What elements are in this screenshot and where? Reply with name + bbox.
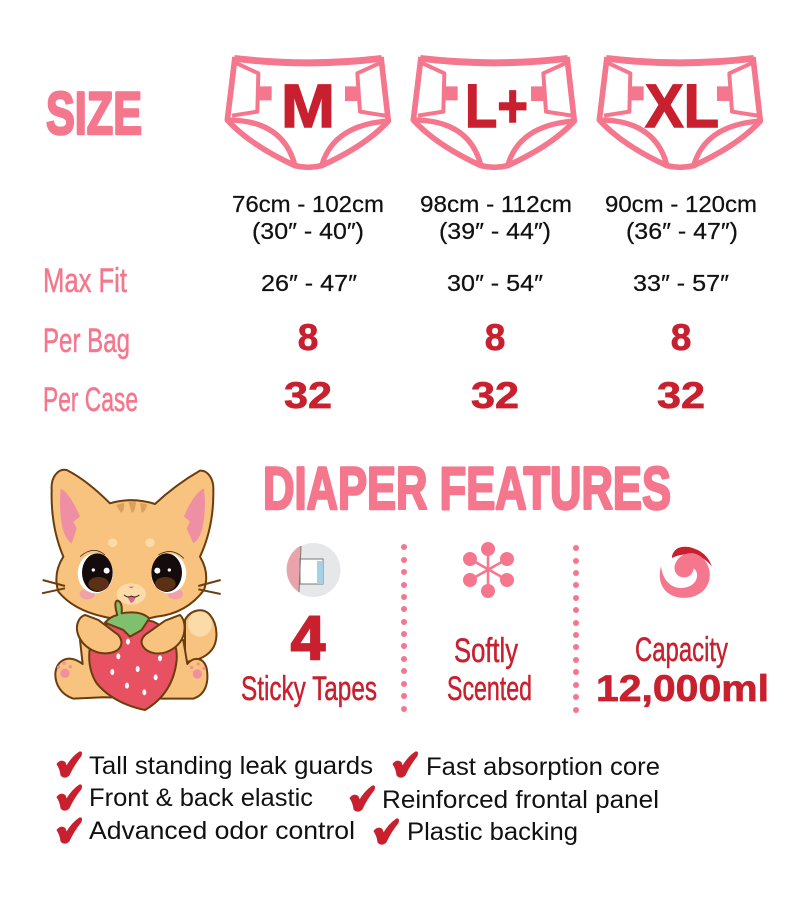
label: Softly Scented [447,632,532,708]
waist sizes M: (30″ - 40″) [252,218,364,244]
body and feet [55,640,207,699]
icon: absorbency swirl [660,547,712,598]
label: Sticky Tapes: Sticky Tapes [241,670,377,708]
per bag values: 8 [671,317,691,358]
label: Per Case: Per Case [43,381,138,419]
waist sizes L+: 98cm - 112cm [420,191,572,217]
waist sizes XL: (36″ - 47″) [626,218,738,244]
per case values: 32 [284,375,332,416]
max fit values: 33″ - 57″ [633,270,729,296]
item: Front and back elastic: Front & back elastic [89,784,313,812]
label: Softly Scented: Softly [454,632,518,670]
diaper icon: L+: L+ [465,72,528,140]
checklist [57,752,660,846]
per bag values: 8 [485,317,505,358]
tail [185,610,216,662]
divider dots 2 [573,545,579,713]
waist sizes L+: (39″ - 44″) [439,218,551,244]
eyes [78,553,113,593]
diaper icon: L+ [413,55,574,167]
divider dots 1 [401,544,407,712]
label: Max Fit: Max Fit [43,262,127,300]
diaper icon: XL: XL [645,72,719,140]
item: Advanced odor control: Advanced odor control [89,817,355,845]
waist sizes L+ [420,191,572,244]
waist sizes M [232,191,384,244]
per case values [284,375,705,416]
number 4: 4 [291,604,326,673]
diaper icon: XL [599,55,760,167]
item: Fast absorption core: Fast absorption core [426,753,660,781]
item: Plastic backing: Plastic backing [407,818,578,846]
value: 12,000ml: 12,000ml [596,668,769,709]
label: Capacity: Capacity [635,631,728,669]
diaper icon: M [227,55,388,167]
cheeks [80,589,95,599]
label: Per Bag: Per Bag [43,322,130,360]
ears [60,488,80,543]
per case values: 32 [657,375,705,416]
strawberry [89,619,177,710]
head [52,470,213,620]
per bag values: 8 [298,317,318,358]
cat mascot with strawberry [42,470,221,710]
item: Reinforced frontal panel: Reinforced frontal panel [382,786,659,814]
waist sizes XL: 90cm - 120cm [605,191,757,217]
max fit values [261,270,729,296]
whiskers [42,580,221,594]
arms [77,615,121,653]
diaper icon: M: M [281,72,335,140]
icon: sticky tape [286,543,340,597]
heading: SIZE: SIZE [46,80,142,147]
waist sizes M: 76cm - 102cm [232,191,384,217]
icon: scent [464,542,514,598]
max fit values: 30″ - 54″ [447,270,543,296]
item: Tall standing leak guards: Tall standing leak guards [89,752,373,780]
leaf [105,601,149,637]
per bag values [298,317,691,358]
per case values: 32 [471,375,519,416]
label: Softly Scented: Scented [447,670,532,708]
waist sizes XL [605,191,757,244]
max fit values: 26″ - 47″ [261,270,357,296]
